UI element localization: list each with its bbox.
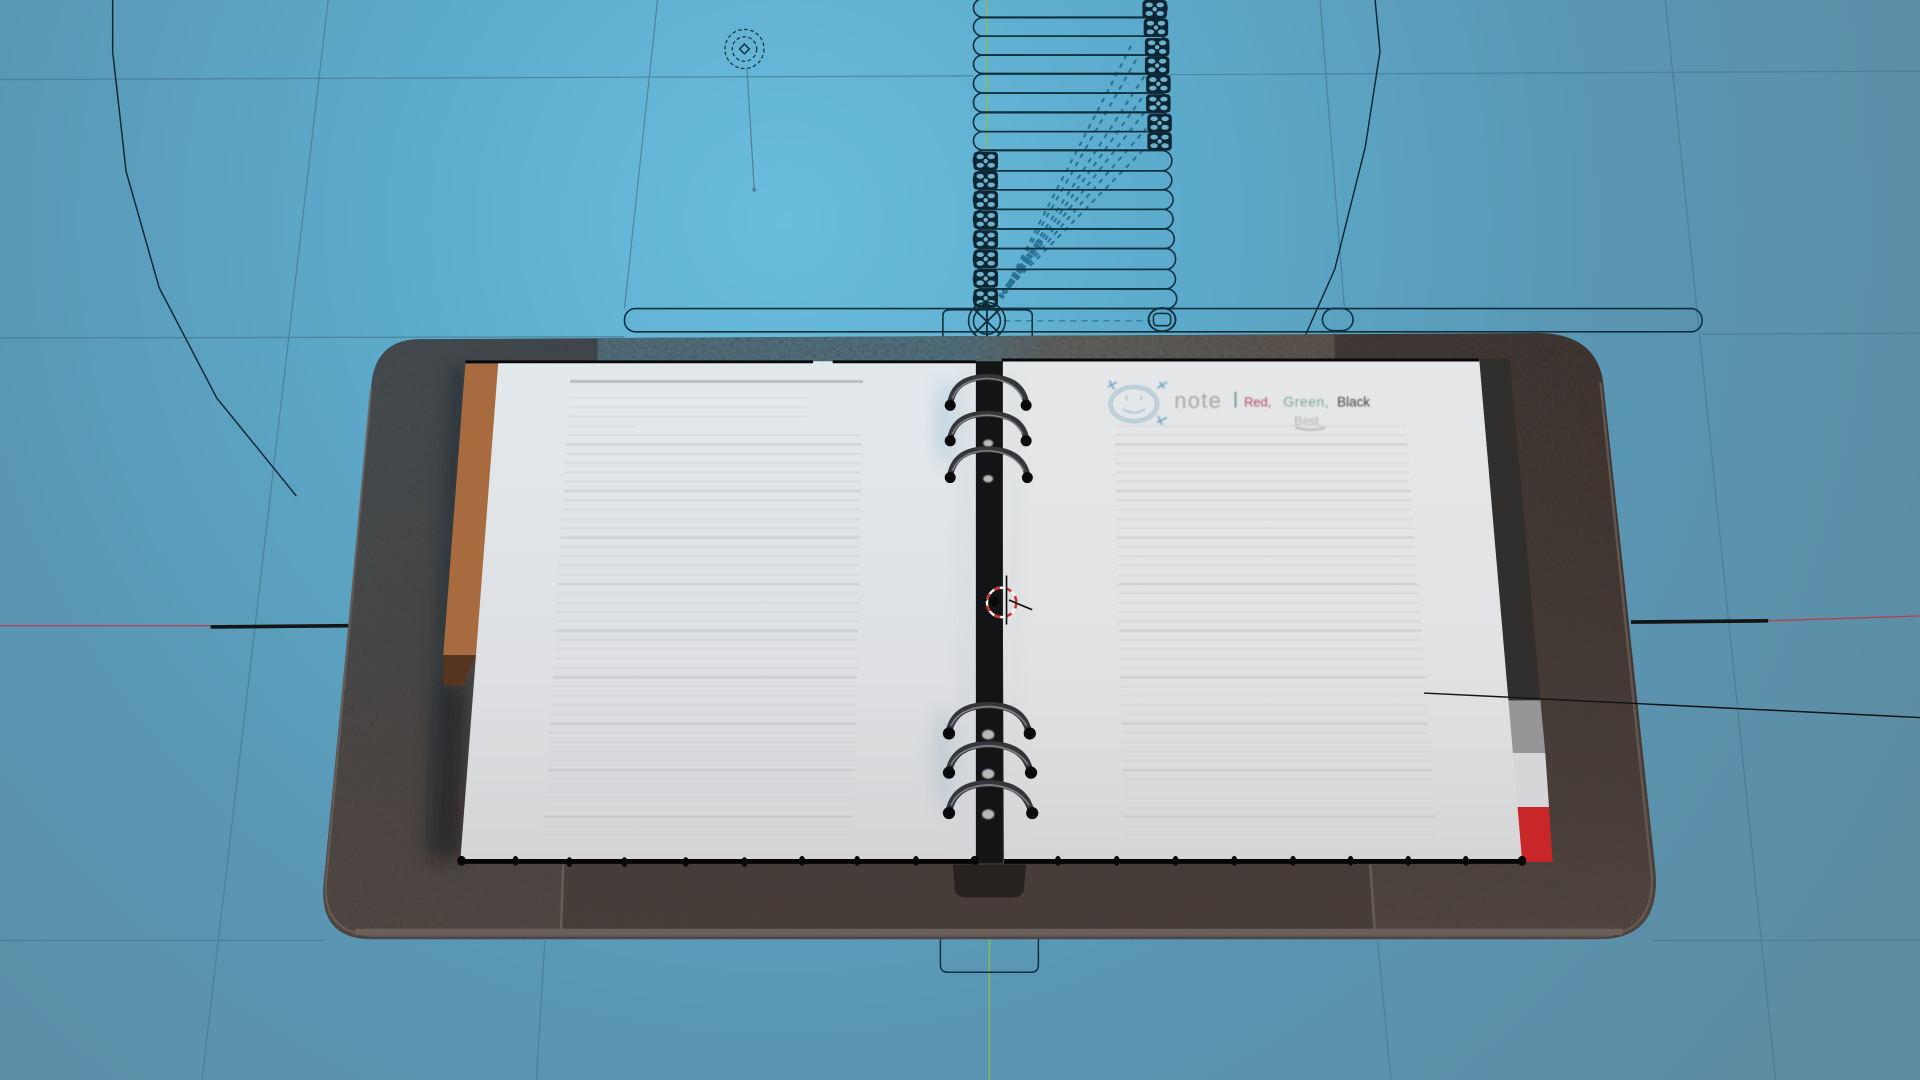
left page	[460, 361, 976, 860]
orange block shadowed base	[443, 655, 476, 686]
cover stitched seams	[561, 864, 1375, 936]
page-turn rig: top capsule rows	[973, 0, 1171, 150]
camera frustum curve: left	[113, 0, 296, 496]
light gizmo	[725, 29, 764, 192]
long base capsule control	[624, 309, 1702, 332]
binder holes	[982, 440, 994, 819]
white tab	[1511, 753, 1549, 807]
cover lower edge band	[355, 929, 1622, 934]
right dark page block edge	[1477, 359, 1540, 700]
underline scribble	[1296, 427, 1325, 430]
red tab	[1515, 807, 1553, 862]
smiley doodle	[1108, 381, 1167, 425]
top ring end tips	[945, 400, 1033, 483]
red X axis, right	[1631, 616, 1920, 622]
camera line crossing right page	[1424, 693, 1920, 718]
binder spine	[976, 361, 1003, 863]
top edge vertex line: left	[465, 361, 976, 363]
leather grain	[323, 333, 1656, 939]
handwritten note heading	[1174, 388, 1370, 430]
green vertical axis	[987, 0, 989, 1080]
heading divider bar	[1235, 392, 1237, 408]
top rings	[945, 377, 1033, 483]
cover spine panel	[561, 862, 1375, 933]
stars around smiley	[1108, 381, 1167, 425]
cover top spine strip	[598, 334, 1335, 362]
page-turn rig: top control nodes	[1142, 0, 1172, 151]
page-turn rig: bottom control nodes	[973, 152, 998, 307]
handwritten note heading: Black	[1337, 395, 1370, 410]
bottom rings	[943, 705, 1038, 819]
shadow beside orange page block	[424, 367, 468, 857]
hinge controls	[943, 302, 1353, 349]
page-turn rig: dashed links	[1000, 43, 1151, 321]
red X axis, left	[0, 626, 349, 627]
clasp outline under the cover	[940, 931, 1038, 972]
shadow under left page bottom corner	[435, 686, 465, 860]
page-turn rig: bottom capsule rows	[973, 151, 1177, 309]
top edge vertex line: right	[1002, 359, 1479, 361]
handwritten note heading: note	[1174, 388, 1222, 413]
grey tab	[1506, 700, 1545, 753]
bottom ring end tips	[943, 727, 1038, 819]
3D cursor	[980, 576, 1032, 624]
binder clasp	[953, 864, 1026, 898]
leather cover	[323, 333, 1656, 939]
right page header rule	[1108, 379, 1406, 381]
cover outer edge highlight	[326, 382, 1652, 936]
right page ruled lines	[1114, 426, 1436, 818]
handwritten note heading: Best	[1294, 414, 1319, 428]
orange page block edge	[443, 364, 500, 655]
bottom edge vertex line: right	[1004, 856, 1526, 866]
page shadows near the rings	[932, 367, 1019, 851]
camera frustum curve: right	[1296, 0, 1380, 358]
handwritten note heading: Red,	[1244, 395, 1271, 410]
bottom edge vertex line: left	[457, 856, 979, 867]
left page ruled lines	[544, 380, 863, 818]
handwritten note heading: Green,	[1283, 394, 1329, 410]
right page	[1002, 359, 1522, 860]
